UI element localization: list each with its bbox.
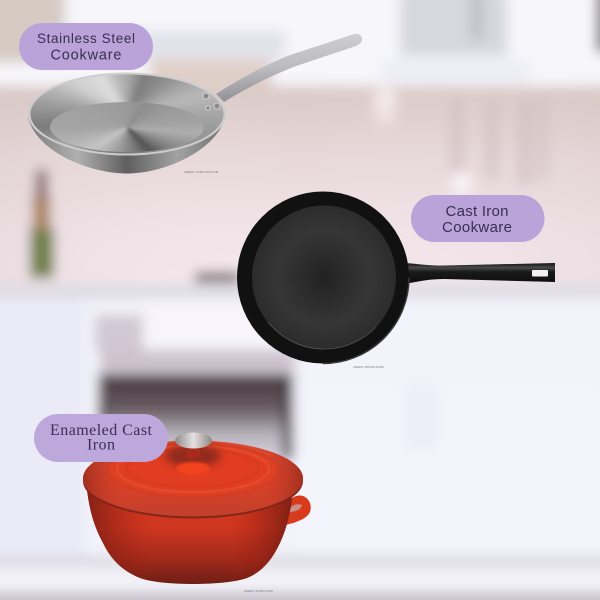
pan inner wall: [30, 74, 224, 154]
label: cast iron cookware: [411, 195, 544, 242]
pot knob: [182, 441, 205, 458]
label: cast iron cookware: Cast Iron: [446, 203, 508, 220]
enameled cast iron pot: [83, 432, 311, 584]
skillet handle: [405, 263, 555, 284]
pot body: [87, 490, 292, 584]
label: cast iron cookware: Cookware: [442, 219, 512, 236]
pan handle: [216, 34, 362, 102]
cast iron skillet: [237, 192, 555, 364]
label: enameled cast iron: Enameled Cast: [50, 422, 153, 439]
pan floor: [50, 102, 204, 152]
skillet cooking surface: [252, 206, 396, 350]
image credit captions: CREDIT: PONG PONG: [244, 589, 273, 593]
label: enameled cast iron: [34, 414, 168, 462]
skillet rim: [237, 192, 409, 364]
label: stainless steel cookware: [19, 23, 153, 70]
label: enameled cast iron: Iron: [87, 436, 115, 454]
stainless steel frying pan: [20, 34, 362, 174]
label: stainless steel cookware: Cookware: [50, 48, 122, 64]
image credit captions: CREDIT: UNSPLASH.COM: [184, 170, 219, 174]
image credit captions: [184, 170, 384, 593]
pot handle: [250, 495, 311, 530]
rivets: [203, 93, 220, 110]
image credit captions: CREDIT: PRONG PONG: [353, 365, 384, 369]
label: stainless steel cookware: Stainless Steel: [37, 31, 135, 46]
pan body: [28, 115, 226, 174]
pot lid: [83, 444, 303, 518]
